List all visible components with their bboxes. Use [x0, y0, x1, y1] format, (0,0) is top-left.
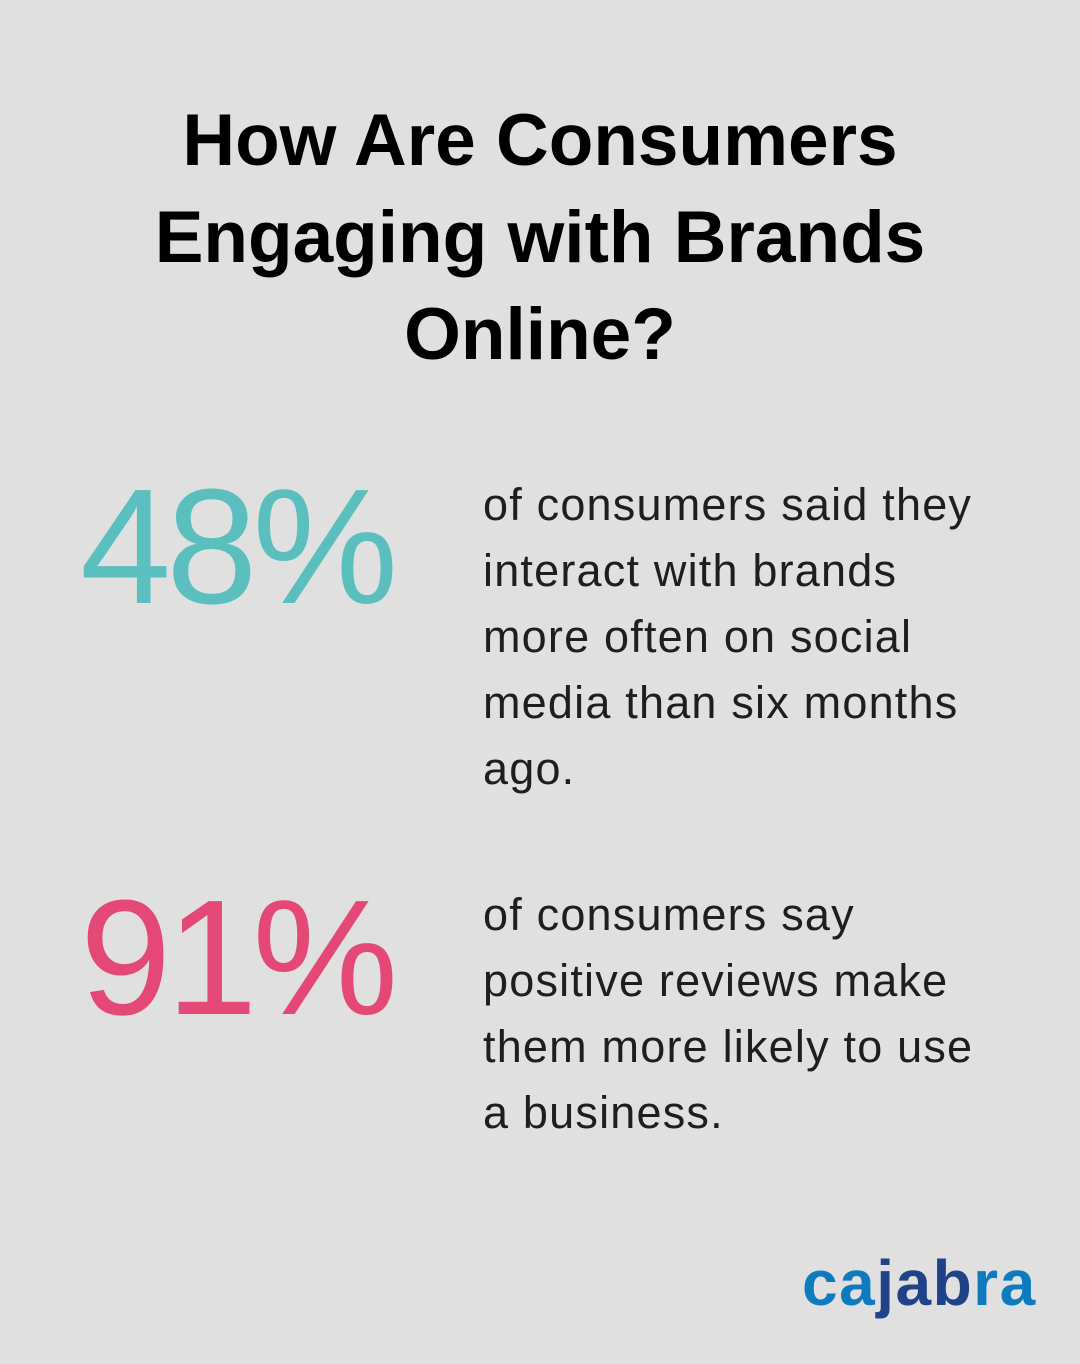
title [155, 100, 925, 375]
text: 48% description: media than six months [483, 677, 958, 728]
text: 91% description: of consumers say [483, 889, 855, 940]
stat: 91%: 91% [80, 866, 393, 1049]
text: 91% description: positive reviews make [483, 955, 948, 1006]
text: 91% description [483, 889, 973, 1138]
text: 48% description: interact with brands [483, 545, 897, 596]
text: 48% description: ago. [483, 743, 575, 794]
logo: cajabra: cajabra [802, 1247, 1037, 1319]
stat: 48%: 48% [80, 455, 393, 638]
title: Online? [404, 294, 676, 375]
text: 48% description: of consumers said they [483, 479, 972, 530]
text: 48% description [483, 479, 972, 794]
title: How Are Consumers [182, 100, 898, 181]
text: 91% description: them more likely to use [483, 1021, 973, 1072]
title: Engaging with Brands [155, 197, 925, 278]
text: 48% description: more often on social [483, 611, 912, 662]
text: 91% description: a business. [483, 1087, 724, 1138]
